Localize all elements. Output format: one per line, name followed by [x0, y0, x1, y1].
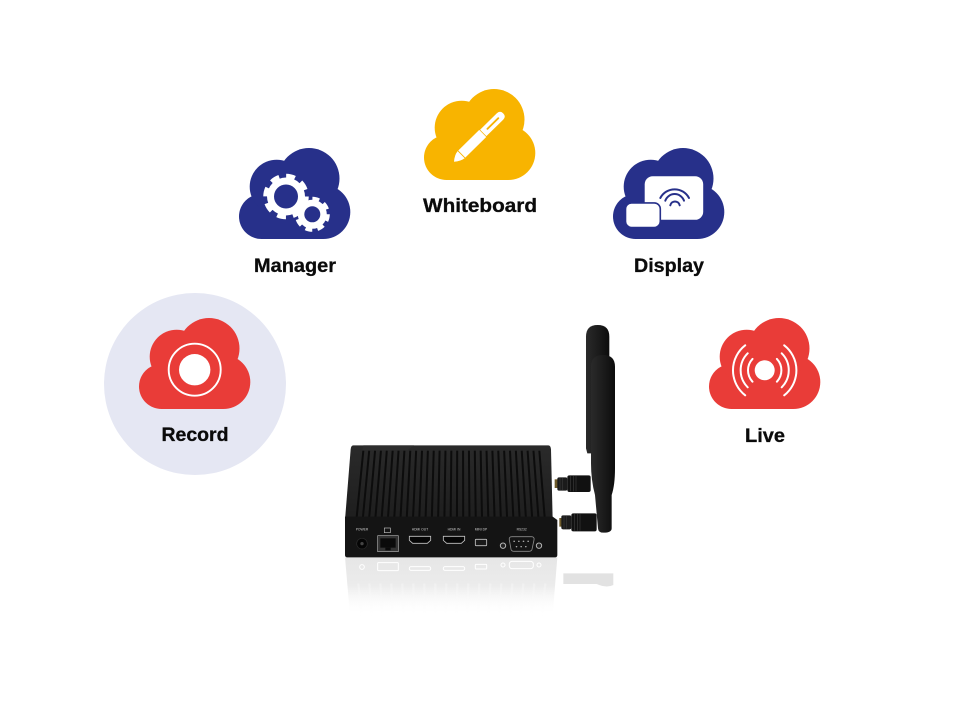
front antenna	[591, 355, 615, 533]
device top with fins	[345, 445, 553, 520]
port labels: MINI DP	[475, 528, 488, 532]
lower connector	[559, 513, 597, 531]
label: Live: Live	[745, 426, 785, 447]
rear antenna	[586, 325, 609, 453]
service: Manager	[239, 148, 350, 277]
port labels: RS232	[517, 528, 527, 532]
label: Whiteboard: Whiteboard	[423, 196, 537, 217]
service: Display	[613, 148, 724, 277]
label: Display: Display	[634, 256, 704, 277]
port labels: HDMI IN	[448, 528, 461, 532]
icon: Whiteboard cloud with pen	[424, 89, 535, 180]
port labels	[356, 528, 527, 533]
icon: Manager cloud with gears	[239, 148, 350, 239]
power port	[357, 538, 367, 549]
service: Whiteboard	[423, 89, 537, 217]
device front panel with ports	[345, 517, 557, 557]
label: Record: Record	[162, 425, 228, 446]
upper connector	[555, 475, 591, 492]
highlight circle behind Record	[104, 293, 286, 475]
device: mini PC with antennas and reflection	[345, 325, 615, 615]
icon: Record cloud	[139, 318, 250, 409]
mini DP port	[475, 539, 487, 546]
HDMI out port	[409, 536, 431, 543]
ethernet port	[378, 536, 398, 552]
icon: Display cloud with screens	[613, 148, 724, 239]
HDMI in port	[443, 536, 465, 543]
label: Manager: Manager	[254, 256, 337, 277]
port labels: HDMI OUT	[412, 528, 428, 532]
service: Record	[139, 318, 250, 446]
RS232 port	[500, 537, 542, 551]
device reflection	[345, 557, 613, 615]
service: Live	[709, 318, 820, 447]
icon: Live cloud with broadcast waves	[709, 318, 820, 409]
port labels: POWER	[356, 528, 369, 532]
